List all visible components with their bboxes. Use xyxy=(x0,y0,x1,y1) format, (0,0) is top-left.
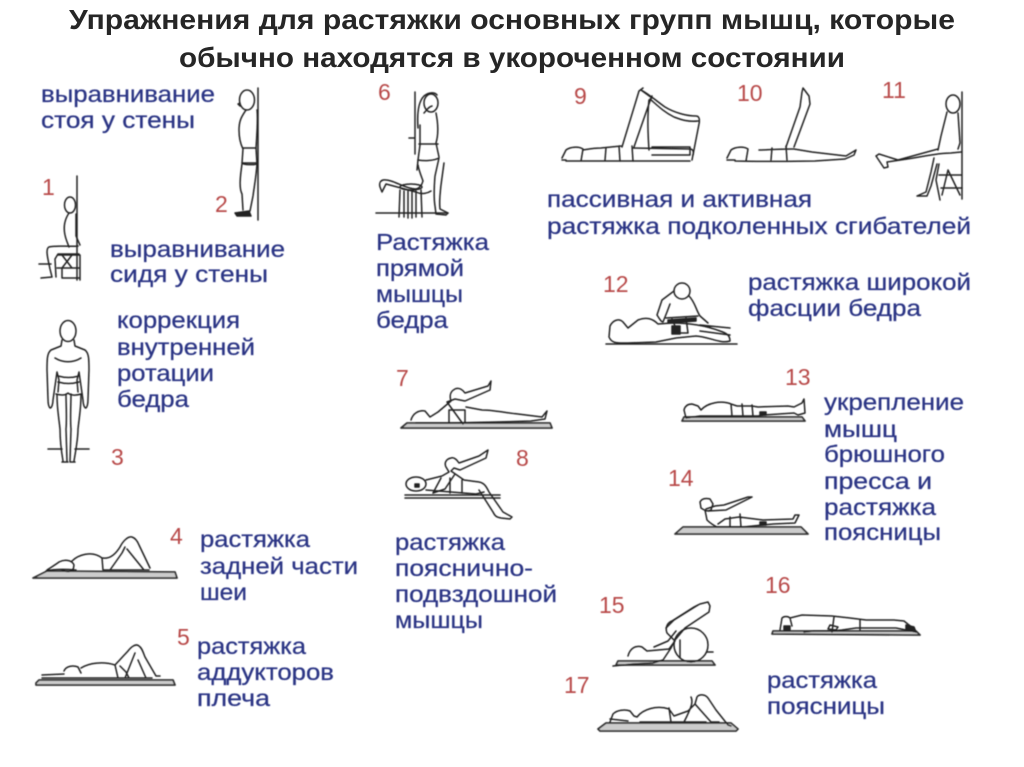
text: sitting alignment xyxy=(110,236,285,287)
number 16: 16 xyxy=(765,572,791,598)
number 13: 13 xyxy=(785,364,811,390)
figure 15: legs raised over ball xyxy=(613,602,715,666)
number 10: 10 xyxy=(737,80,763,106)
text: iliopsoas stretch: пояснично- xyxy=(395,555,533,581)
text: hip rotation correction: ротации xyxy=(117,360,214,386)
figure 9: passive leg stretch with strap xyxy=(562,88,699,161)
text: back of neck stretch xyxy=(200,526,358,605)
text: standing alignment xyxy=(41,81,215,133)
number 12: 12 xyxy=(603,271,629,297)
figure 14: abdominal curl xyxy=(675,497,808,534)
text: standing alignment: выравнивание xyxy=(41,81,215,107)
figure 6: quad stretch on stool xyxy=(376,92,448,218)
figure 10: active leg raise xyxy=(727,88,856,161)
text: hamstring stretch: пассивная и активная xyxy=(547,186,812,212)
text: shoulder adductors stretch: плеча xyxy=(197,685,270,711)
text: iliopsoas stretch: мышцы xyxy=(395,607,483,633)
text: abdominal strengthening: мышц xyxy=(824,416,897,442)
panel: exercises xyxy=(33,77,971,731)
text: fascia lata stretch: растяжка широкой xyxy=(748,269,971,295)
number 9: 9 xyxy=(574,83,587,109)
figure 1: sitting at wall xyxy=(39,176,80,280)
text: abdominal strengthening: брюшного xyxy=(824,441,945,467)
text: rectus femoris stretch: мышцы xyxy=(376,281,463,307)
text: fascia lata stretch: фасции бедра xyxy=(748,295,921,321)
text: hip rotation correction xyxy=(117,307,255,412)
text: abdominal strengthening: поясницы xyxy=(824,519,941,545)
text: iliopsoas stretch: растяжка xyxy=(395,529,505,555)
number 17: 17 xyxy=(564,672,590,698)
text: abdominal strengthening: пресса и xyxy=(824,468,932,494)
number 1: 1 xyxy=(42,174,55,200)
text: abdominal strengthening: растяжка xyxy=(824,494,936,520)
figure 11: seated leg extension xyxy=(876,92,962,200)
text: sitting alignment: выравнивание xyxy=(110,236,285,262)
text: fascia lata stretch xyxy=(748,269,971,321)
figure 3: standing front view xyxy=(47,320,89,462)
text: iliopsoas stretch xyxy=(395,529,557,633)
text: abdominal strengthening xyxy=(824,389,964,545)
text: hamstring stretch xyxy=(547,186,971,239)
number 5: 5 xyxy=(177,624,190,650)
text: back of neck stretch: задней части xyxy=(200,553,358,579)
text: abdominal strengthening: укрепление xyxy=(824,389,964,415)
figure 17: lying knee bent xyxy=(598,695,738,731)
number 11: 11 xyxy=(882,77,906,103)
text: hip rotation correction: коррекция xyxy=(117,307,240,333)
text: lower back stretch: поясницы xyxy=(767,693,885,719)
text: shoulder adductors stretch: аддукторов xyxy=(197,659,334,685)
text: hip rotation correction: внутренней xyxy=(117,334,255,360)
figure 8: knee hug with dangling leg xyxy=(405,450,512,519)
text: iliopsoas stretch: подвздошной xyxy=(395,581,557,607)
text: standing alignment: стоя у стены xyxy=(41,107,195,133)
text: sitting alignment: сидя у стены xyxy=(110,261,268,287)
text: hip rotation correction: бедра xyxy=(117,386,189,412)
text: rectus femoris stretch xyxy=(376,229,489,333)
figure 13: lying flat on mat xyxy=(682,399,805,421)
text: rectus femoris stretch: прямой xyxy=(376,255,464,281)
number 4: 4 xyxy=(170,523,183,549)
text: lower back stretch: растяжка xyxy=(767,667,877,693)
text: rectus femoris stretch: бедра xyxy=(376,307,448,333)
number 6: 6 xyxy=(378,79,391,105)
number 2: 2 xyxy=(215,191,228,217)
title: обычно находятся в укороченном состоянии xyxy=(179,42,845,73)
figure 4: lying knee bent xyxy=(33,537,177,578)
text: lower back stretch xyxy=(767,667,885,719)
figure 7: knee hug on mat xyxy=(401,381,552,428)
text: back of neck stretch: растяжка xyxy=(200,526,310,552)
figure 5: lying arms out xyxy=(36,645,175,685)
number 8: 8 xyxy=(516,445,529,471)
figure 2: standing at wall xyxy=(235,88,258,220)
text: shoulder adductors stretch xyxy=(197,633,334,711)
title xyxy=(69,4,955,73)
figure 16: prone on mat xyxy=(772,615,920,635)
title: Упражнения для растяжки основных групп мышц, которые xyxy=(69,4,955,35)
text: back of neck stretch: шеи xyxy=(200,579,247,605)
number 3: 3 xyxy=(111,444,124,470)
number 15: 15 xyxy=(599,592,625,618)
number 14: 14 xyxy=(668,465,694,491)
number 7: 7 xyxy=(396,365,409,391)
text: rectus femoris stretch: Растяжка xyxy=(376,229,489,255)
figure 12: assisted fascia stretch xyxy=(606,283,737,344)
text: hamstring stretch: растяжка подколенных сгибателей xyxy=(547,213,971,239)
text: shoulder adductors stretch: растяжка xyxy=(197,633,306,659)
